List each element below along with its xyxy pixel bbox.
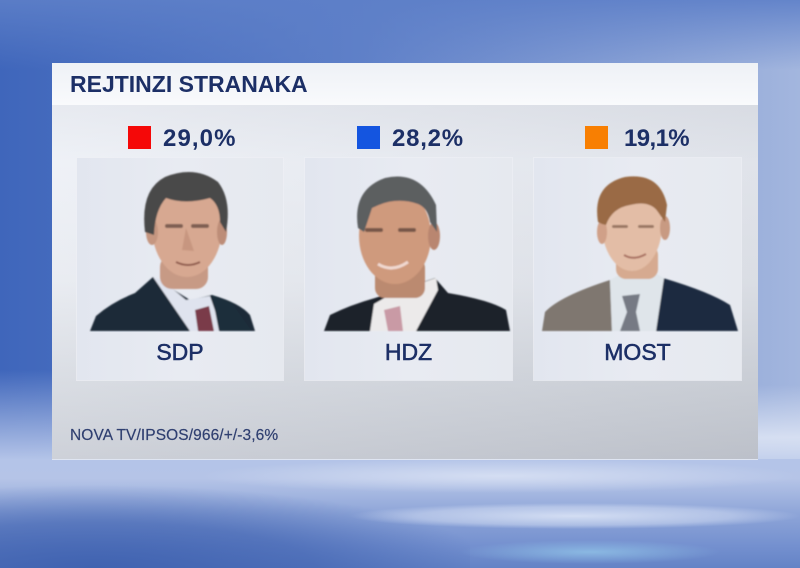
label: MOST: MOST: [604, 339, 671, 365]
swatch: HDZ blue: [357, 126, 380, 149]
swatch: MOST orange: [585, 126, 608, 149]
label: HDZ: HDZ: [385, 339, 432, 365]
label: SDP: SDP: [156, 339, 204, 365]
heading: REJTINZI STRANAKA: [70, 71, 308, 97]
portrait: HDZ leader: [323, 176, 511, 332]
value: MOST: 19,1%: [624, 124, 689, 152]
source note: NOVA TV/IPSOS/966/+/-3,6%: [70, 427, 278, 444]
portrait: MOST leader: [541, 175, 739, 332]
card: MOST: [534, 158, 741, 380]
header band: [52, 63, 758, 105]
panel: ratings: [52, 63, 758, 459]
value: SDP: 29,0%: [163, 124, 237, 152]
value: HDZ: 28,2%: [392, 124, 464, 152]
portrait: SDP leader: [89, 171, 256, 332]
card: SDP: [77, 158, 283, 380]
card: HDZ: [305, 158, 512, 380]
swatch: SDP red: [128, 126, 151, 149]
